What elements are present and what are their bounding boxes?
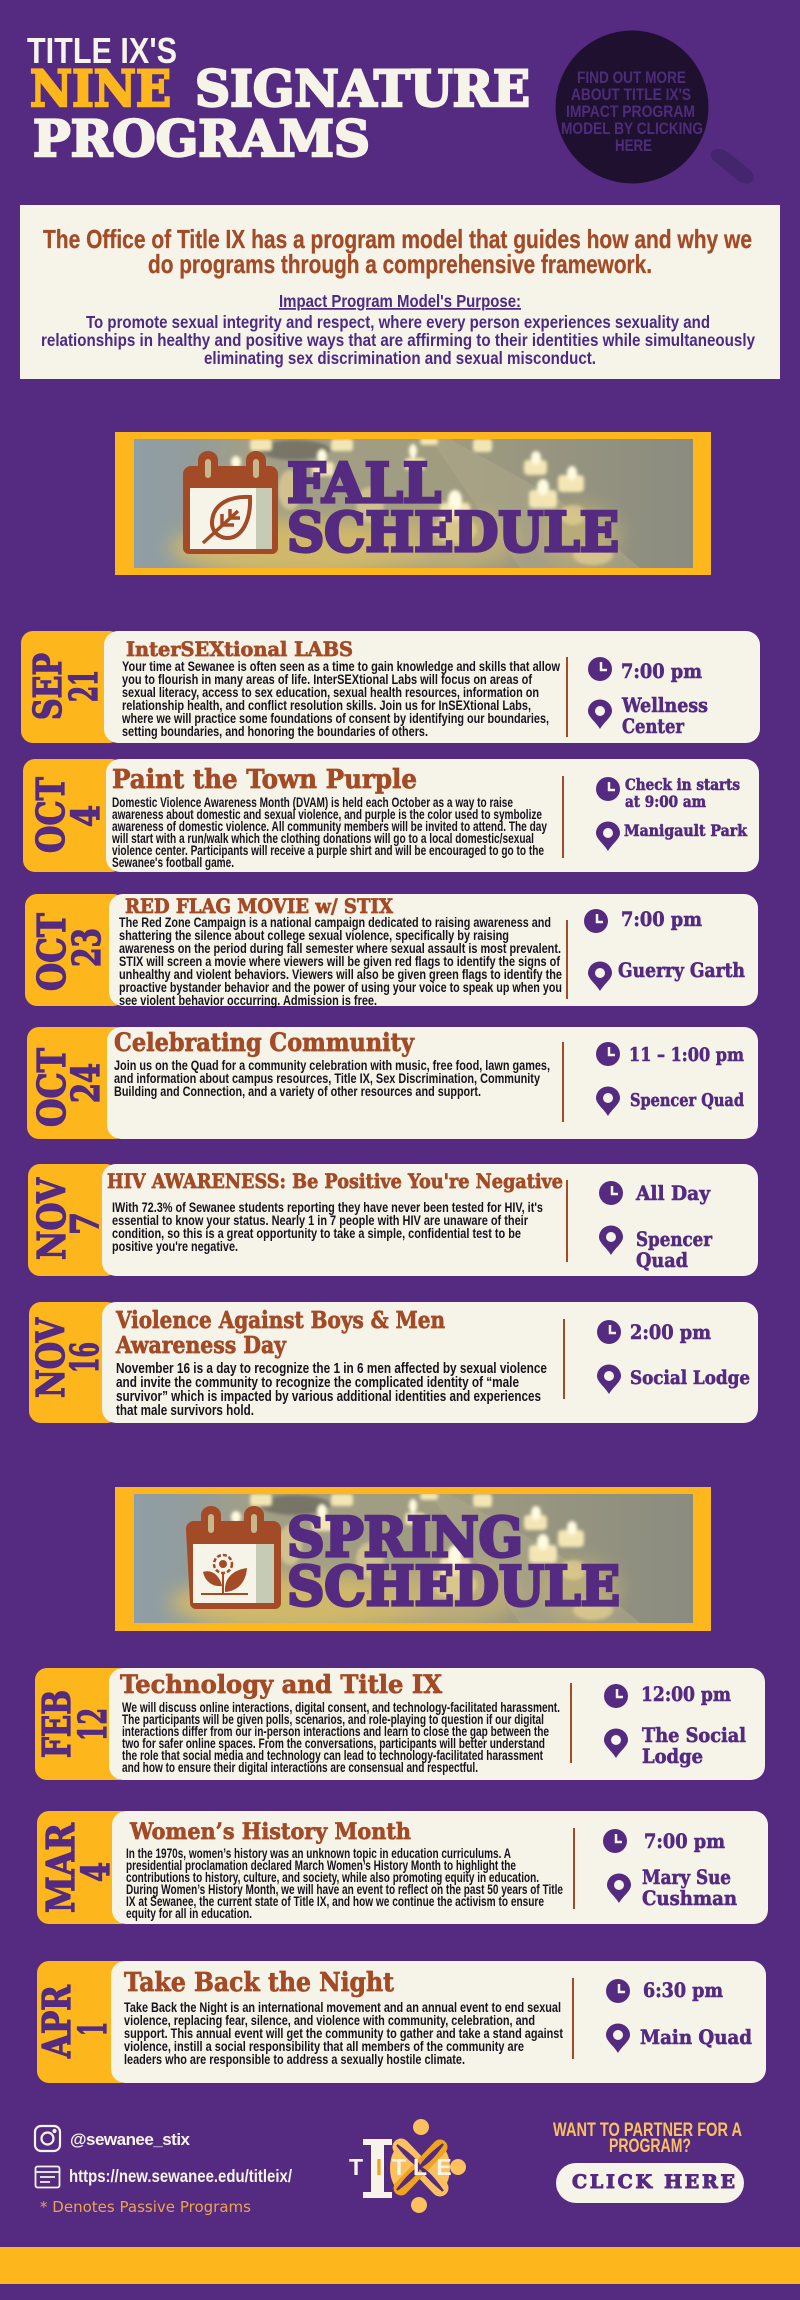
description: that male survivors hold. bbox=[116, 1403, 254, 1419]
event card: Paint the Town Purple bbox=[23, 759, 759, 872]
description: two for safer online spaces. From the conversations, participants will better understand bbox=[122, 1736, 545, 1751]
spring heading: SCHEDULE bbox=[287, 1554, 620, 1618]
description: presidential proclamation declared March Women’s History Month to highlight the bbox=[126, 1858, 516, 1873]
description: The participants will be given polls, scenarios, and role-playing to question if our digital bbox=[122, 1712, 544, 1727]
event title: Celebrating Community bbox=[114, 1028, 415, 1057]
date: 7 bbox=[62, 1212, 107, 1235]
description bbox=[111, 795, 547, 870]
description: violence center. Participants will receive a purple shirt and will be encouraged to go to the bbox=[112, 843, 544, 858]
description: In the 1970s, women’s history was an unknown topic in education curriculums. A bbox=[126, 1846, 511, 1861]
description: and information about campus resources, Title IX, Sex Discrimination, Community bbox=[114, 1071, 540, 1086]
description: The Red Zone Campaign is a national campaign dedicated to raising awareness and bbox=[119, 915, 551, 930]
footer bar bbox=[0, 2247, 800, 2284]
date bbox=[34, 1690, 115, 1758]
time and place: Manigault Park bbox=[624, 821, 747, 840]
event card: Take Back the Night bbox=[34, 1961, 766, 2083]
description: will start with a run/walk which the clothing donations will go to a local domestic/sexual bbox=[111, 831, 534, 846]
date bbox=[38, 1823, 118, 1913]
date bbox=[29, 913, 109, 991]
description bbox=[116, 1361, 547, 1419]
description: Take Back the Night is an international movement and an annual event to end sexual bbox=[124, 1999, 561, 2015]
date: NOV bbox=[28, 1317, 73, 1398]
intro heading: do programs through a comprehensive framework. bbox=[148, 249, 652, 279]
date: APR bbox=[34, 1985, 79, 2059]
description bbox=[122, 1700, 560, 1775]
description: During Women’s History Month, we will have an event to reflect on the past 50 years of Title bbox=[126, 1882, 563, 1897]
time and place: Wellness bbox=[621, 693, 708, 717]
partner call to action: WANT TO PARTNER FOR A bbox=[553, 2120, 742, 2141]
icon: fall calendar bbox=[183, 451, 278, 554]
description bbox=[119, 915, 562, 1008]
Title IX logo bbox=[349, 2119, 466, 2213]
title bbox=[27, 30, 530, 168]
time and place bbox=[603, 1829, 737, 1910]
description: awareness about domestic and sexual violence, and purple is the color used to symbolize bbox=[112, 807, 542, 822]
time and place: Cushman bbox=[642, 1886, 737, 1910]
footer contact links: @sewanee_stix bbox=[70, 2130, 191, 2149]
description: Building and Connection, and a variety of other resources and support. bbox=[114, 1084, 481, 1099]
Title IX logo: I bbox=[376, 2154, 382, 2180]
description: Join us on the Quad for a community celebration with music, free food, lawn games, bbox=[114, 1058, 550, 1073]
date bbox=[28, 777, 108, 853]
time and place: 2:00 pm bbox=[630, 1320, 711, 1344]
date bbox=[29, 1048, 108, 1127]
time and place bbox=[606, 1978, 752, 2053]
description: November 16 is a day to recognize the 1 in 6 men affected by sexual violence bbox=[116, 1361, 547, 1377]
time and place bbox=[596, 1042, 744, 1116]
Title IX logo: E bbox=[436, 2154, 452, 2180]
description: equity for all in education. bbox=[126, 1906, 252, 1921]
time and place: 7:00 pm bbox=[621, 659, 702, 683]
description: violence, instill a social responsibility that all members of the community are bbox=[124, 2038, 524, 2054]
description: support. This annual event will get the community to gather and take a stand against bbox=[124, 2025, 563, 2041]
description: STIX will screen a movie where viewers will be given red flags to identify the signs of bbox=[119, 954, 560, 969]
date: NOV bbox=[29, 1177, 74, 1260]
date: 12 bbox=[70, 1708, 115, 1741]
description: Sewanee's football game. bbox=[112, 855, 234, 870]
time and place: Mary Sue bbox=[642, 1865, 731, 1889]
date: 1 bbox=[70, 2022, 115, 2036]
panel: program model intro bbox=[20, 205, 780, 379]
date: 4 bbox=[63, 805, 108, 827]
description: survivor” which is impacted by various additional identities and experiences bbox=[116, 1389, 541, 1405]
time and place bbox=[588, 657, 708, 738]
event title: Violence Against Boys & Men bbox=[115, 1307, 445, 1334]
description: positive you're negative. bbox=[112, 1239, 238, 1254]
event title: Awareness Day bbox=[115, 1332, 287, 1359]
event title: RED FLAG MOVIE w/ STIX bbox=[125, 895, 394, 918]
description: leaders who are responsible to address a sexually hostile climate. bbox=[124, 2051, 465, 2067]
event card: Technology and Title IX bbox=[34, 1668, 765, 1780]
description: setting boundaries, and honoring the boundaries of others. bbox=[122, 724, 428, 739]
date: 21 bbox=[61, 670, 106, 702]
magnifier callout bbox=[556, 30, 754, 184]
description: violence, replacing fear, silence, and violence with community, celebration, and bbox=[124, 2012, 535, 2028]
banner: spring schedule bbox=[115, 1487, 711, 1631]
time and place: Guerry Garth bbox=[618, 958, 745, 982]
time and place: Main Quad bbox=[640, 2025, 752, 2049]
time and place: Center bbox=[622, 714, 684, 738]
time and place: 12:00 pm bbox=[641, 1682, 731, 1706]
description: awareness on the period during fall semester where sexual assault is most prevalent. bbox=[119, 941, 561, 956]
time and place: Spencer Quad bbox=[630, 1090, 744, 1111]
date: MAR bbox=[38, 1823, 83, 1913]
description bbox=[124, 1999, 563, 2067]
event title: Women’s History Month bbox=[129, 1819, 411, 1845]
description: the role that social media and technology can lead to technology-facilitated harassment bbox=[122, 1748, 543, 1763]
Title IX logo: T bbox=[349, 2154, 363, 2180]
date: 24 bbox=[63, 1063, 108, 1103]
description: you to flourish in many areas of life. InterSEXtional Labs will focus on areas of bbox=[122, 672, 532, 687]
time and place: Social Lodge bbox=[630, 1367, 750, 1389]
title: NINE bbox=[30, 59, 171, 118]
description: see violent behavior occurring. Admission is free. bbox=[119, 993, 377, 1008]
purpose text bbox=[41, 291, 755, 368]
description: IX at Sewanee, the current state of Title IX, and how we continue the activism to ensure bbox=[126, 1894, 544, 1909]
icon: spring calendar bbox=[186, 1506, 281, 1609]
date: SEP bbox=[25, 653, 70, 720]
description: and invite the community to recognize the complicated identity of “male bbox=[116, 1375, 519, 1391]
magnifier callout: FIND OUT MORE bbox=[577, 68, 686, 87]
date bbox=[29, 1177, 107, 1260]
event card: Celebrating Community bbox=[27, 1027, 758, 1139]
date: OCT bbox=[28, 777, 73, 853]
description bbox=[121, 659, 560, 739]
time and place: 7:00 pm bbox=[644, 1829, 725, 1853]
description: We will discuss online interactions, digital consent, and technology-facilitated harassment. bbox=[122, 1700, 560, 1715]
description: relationship health, and conflict resolution skills. Join us for InSEXtional Labs, bbox=[122, 698, 531, 713]
event title: InterSEXtional LABS bbox=[126, 637, 353, 661]
date bbox=[25, 653, 106, 720]
description: unhealthy and violent behaviors. Viewers will also be given green flags to identify the bbox=[119, 967, 562, 982]
event card: Red Flag Movie bbox=[25, 894, 758, 1008]
click here button bbox=[556, 2163, 744, 2203]
spring heading bbox=[287, 1505, 620, 1618]
description: awareness of domestic violence. All community members will be invited to attend. The day bbox=[112, 819, 547, 834]
purpose text: To promote sexual integrity and respect, where every person experiences sexuality and bbox=[86, 312, 710, 332]
time and place: at 9:00 am bbox=[625, 792, 707, 811]
purpose text: Impact Program Model's Purpose: bbox=[279, 291, 521, 311]
icon: instagram bbox=[35, 2126, 60, 2151]
Title IX logo: T bbox=[392, 2154, 406, 2180]
partner call to action: PROGRAM? bbox=[609, 2136, 691, 2157]
partner call to action bbox=[553, 2120, 744, 2203]
magnifier callout: IMPACT PROGRAM bbox=[566, 102, 695, 121]
date: 16 bbox=[62, 1342, 107, 1373]
date: 23 bbox=[64, 928, 109, 967]
click here button: CLICK HERE bbox=[572, 2171, 735, 2193]
title: TITLE IX'S bbox=[27, 30, 177, 71]
description: Domestic Violence Awareness Month (DVAM) is held each October as a way to raise bbox=[112, 795, 513, 810]
description bbox=[126, 1846, 563, 1921]
event title bbox=[115, 1307, 445, 1359]
event card: InterSEXtional Labs bbox=[21, 631, 760, 743]
time and place: 6:30 pm bbox=[643, 1978, 723, 2002]
event card: HIV Awareness bbox=[28, 1164, 758, 1276]
description: and how to ensure their digital interactions are consensual and respectful. bbox=[122, 1760, 478, 1775]
time and place bbox=[599, 1181, 712, 1272]
event title: HIV AWARENESS: Be Positive You're Negative bbox=[107, 1169, 563, 1193]
date bbox=[34, 1985, 115, 2059]
description: where we will practice some foundations of consent by identifying our boundaries, bbox=[121, 711, 549, 726]
time and place: The Social bbox=[642, 1723, 746, 1747]
description: shattering the silence about college sexual violence, specifically by raising bbox=[119, 928, 509, 943]
magnifier callout: ABOUT TITLE IX'S bbox=[571, 85, 691, 104]
date: OCT bbox=[29, 1048, 74, 1127]
description bbox=[114, 1058, 550, 1099]
event title: Paint the Town Purple bbox=[112, 765, 417, 795]
banner: fall schedule bbox=[115, 432, 711, 576]
magnifier callout: HERE bbox=[615, 136, 652, 155]
Title IX logo: L bbox=[413, 2154, 427, 2180]
event title: Take Back the Night bbox=[124, 1968, 394, 1998]
time and place: Lodge bbox=[642, 1744, 703, 1768]
magnifier callout: MODEL BY CLICKING bbox=[561, 119, 703, 138]
time and place bbox=[596, 775, 747, 851]
time and place: 11 – 1:00 pm bbox=[629, 1044, 744, 1066]
description: condition, so this is a great opportunity to take a simple, confidential test to be bbox=[112, 1226, 521, 1241]
event card: Violence Against Boys and Men bbox=[28, 1302, 758, 1423]
intro heading bbox=[43, 224, 752, 279]
time and place: 7:00 pm bbox=[621, 907, 702, 931]
date: FEB bbox=[34, 1690, 79, 1758]
date: OCT bbox=[29, 913, 74, 991]
time and place: All Day bbox=[635, 1181, 711, 1205]
description: sexual literacy, access to sex education, sexual health resources, information on bbox=[122, 685, 539, 700]
description: proactive bystander behavior and the power of using your voice to speak up when you bbox=[119, 980, 562, 995]
event title: Technology and Title IX bbox=[120, 1670, 443, 1699]
footer contact links bbox=[35, 2126, 292, 2216]
icon: website bbox=[36, 2166, 60, 2188]
description: IWith 72.3% of Sewanee students reporting they have never been tested for HIV, it's bbox=[112, 1200, 543, 1215]
time and place: Spencer bbox=[636, 1227, 712, 1251]
fall heading: SCHEDULE bbox=[287, 500, 619, 564]
description: contributions to history, culture, and society, while also promoting equity in education. bbox=[126, 1870, 539, 1885]
footer contact links: https://new.sewanee.edu/titleix/ bbox=[69, 2166, 292, 2186]
date bbox=[28, 1317, 107, 1398]
fall heading: FALL bbox=[287, 451, 441, 515]
time and place: Quad bbox=[636, 1248, 688, 1272]
time and place bbox=[604, 1682, 746, 1768]
title: PROGRAMS bbox=[33, 109, 370, 168]
time and place bbox=[584, 907, 745, 991]
description: interactions differ from our in-person interactions and learn to close the gap between the bbox=[122, 1724, 549, 1739]
purpose text: eliminating sex discrimination and sexual misconduct. bbox=[204, 348, 596, 368]
fall heading bbox=[287, 451, 619, 564]
description bbox=[112, 1200, 543, 1254]
time and place bbox=[597, 1320, 750, 1394]
spring heading: SPRING bbox=[287, 1505, 523, 1569]
description: Your time at Sewanee is often seen as a time to gain knowledge and skills that allow bbox=[122, 659, 560, 674]
passive programs note: * Denotes Passive Programs bbox=[40, 2198, 251, 2216]
event card: Women's History Month bbox=[37, 1811, 768, 1924]
title: SIGNATURE bbox=[195, 59, 530, 118]
description: essential to know your status. Nearly 1 in 7 people with HIV are unaware of their bbox=[112, 1213, 529, 1228]
date: 4 bbox=[73, 1862, 118, 1882]
time and place: Check in starts bbox=[625, 775, 740, 794]
